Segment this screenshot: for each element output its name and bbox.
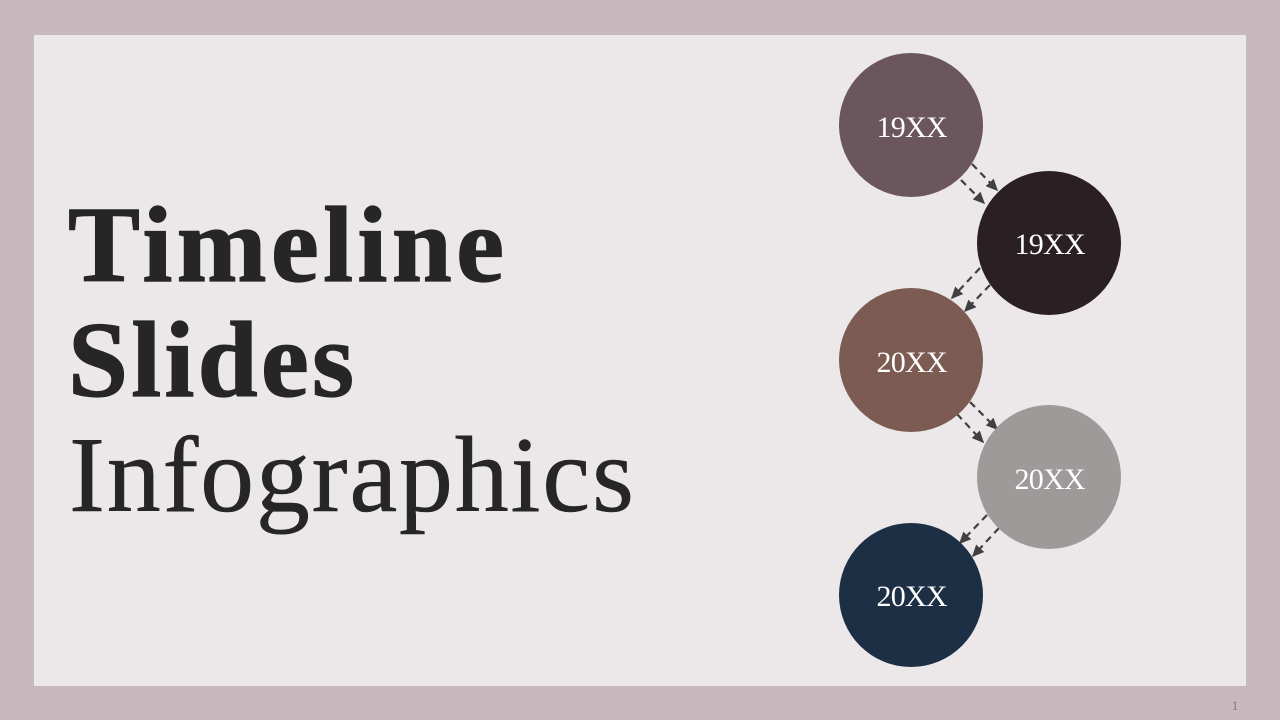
node 2: 19XX <box>977 171 1121 315</box>
arrows: 19XX to 19XX <box>961 164 997 203</box>
timeline <box>839 53 1121 667</box>
node 2: 19XX: 19XX <box>1014 228 1086 261</box>
node 5: 20XX: 20XX <box>876 580 948 613</box>
node 1: 19XX <box>839 53 983 197</box>
node 4: 20XX <box>977 405 1121 549</box>
title <box>68 186 634 535</box>
node 3: 20XX <box>839 288 983 432</box>
arrows: 19XX to 20XX <box>952 268 990 311</box>
title line: Timeline: Timeline <box>68 186 504 305</box>
node 4: 20XX: 20XX <box>1014 463 1086 496</box>
arrows: 20XX to 20XX lower <box>960 515 999 556</box>
title line: Infographics: Infographics <box>69 416 634 535</box>
node 3: 20XX: 20XX <box>876 346 948 379</box>
arrows: 20XX to 20XX <box>957 402 997 442</box>
title line: Slides: Slides <box>68 301 354 420</box>
page number: 1 <box>1232 698 1238 713</box>
node 1: 19XX: 19XX <box>876 111 948 144</box>
node 5: 20XX <box>839 523 983 667</box>
